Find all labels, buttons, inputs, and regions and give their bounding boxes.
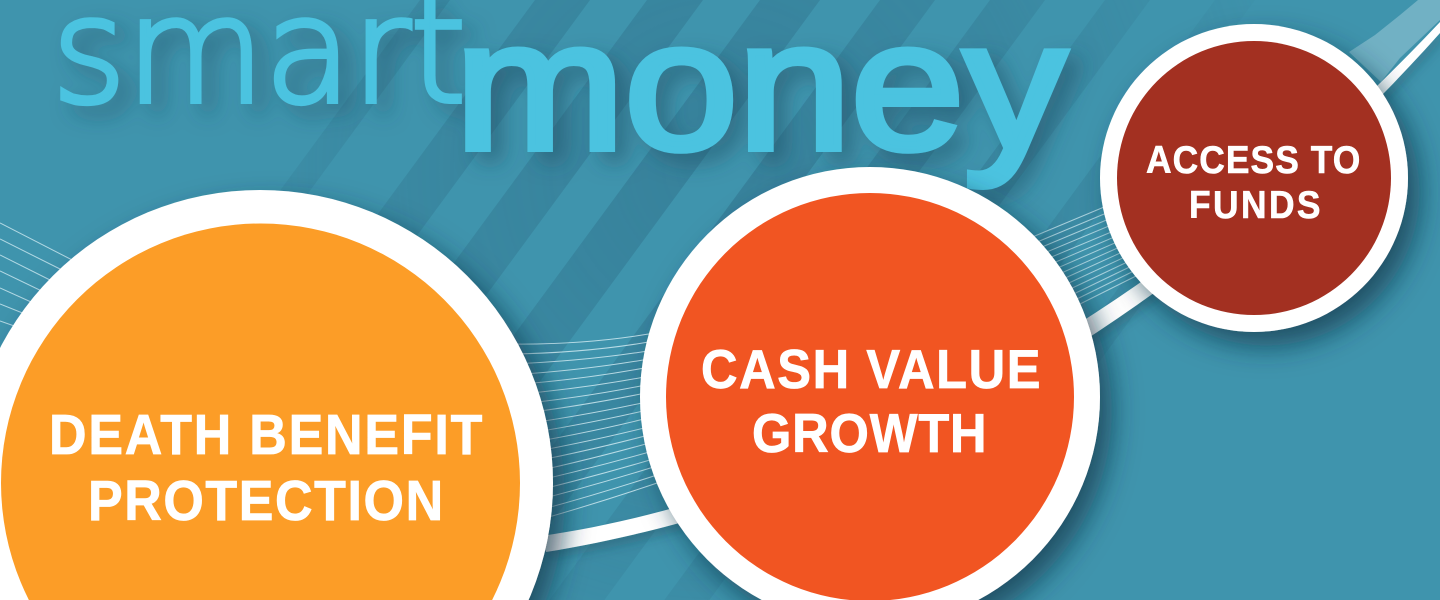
circle: death benefit protection [0, 190, 553, 600]
label: cash value growth: CASH VALUE [701, 339, 1040, 400]
label: access to funds [1146, 139, 1360, 226]
title: smart money [52, 0, 1067, 188]
fine lines: left ribbon [0, 223, 80, 328]
fine lines: middle ribbon [510, 332, 660, 528]
diagonal stripes [308, 0, 1122, 582]
label: death benefit protection: PROTECTION [88, 469, 443, 532]
label: death benefit protection: DEATH BENEFIT [49, 403, 482, 466]
white swoosh curve [541, 22, 1440, 552]
label: cash value growth: GROWTH [752, 403, 987, 464]
label: death benefit protection [49, 403, 482, 532]
fine lines: right ribbon [1030, 192, 1140, 329]
label: access to funds: ACCESS TO [1146, 139, 1360, 181]
circle: cash value growth [640, 167, 1100, 600]
label: cash value growth [701, 339, 1040, 464]
label: access to funds: FUNDS [1189, 184, 1321, 226]
fine lines: top-right ribbon [1349, 0, 1440, 82]
circle: access to funds [1100, 24, 1408, 332]
